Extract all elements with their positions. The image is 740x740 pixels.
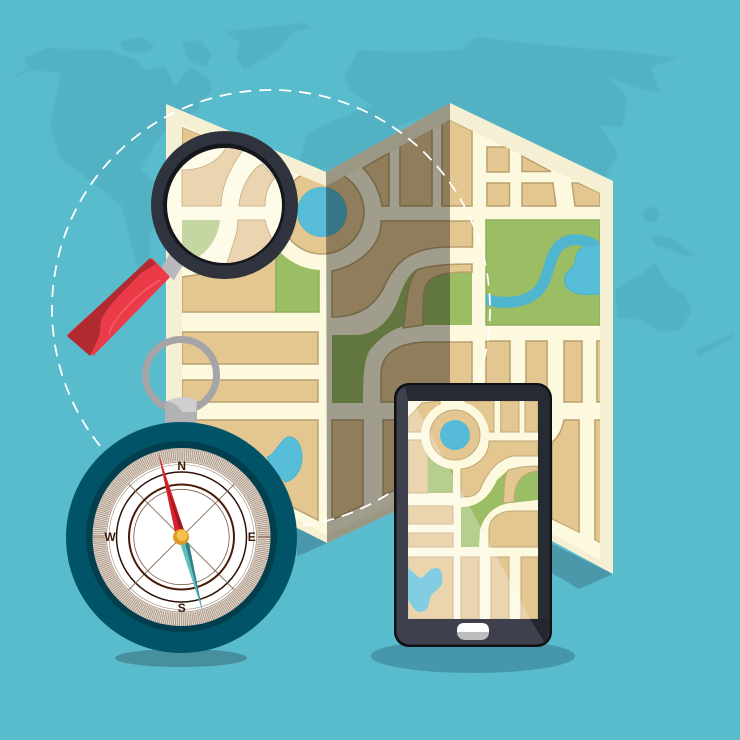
phone roundabout	[421, 401, 489, 469]
dashed route circle	[52, 90, 490, 528]
map sheet	[166, 103, 613, 574]
compass	[66, 340, 297, 667]
map blocks	[182, 120, 603, 545]
smartphone	[371, 383, 575, 673]
fold shadow on middle panel	[326, 103, 450, 543]
phone shadow	[371, 639, 575, 673]
compass letters: W	[104, 530, 116, 544]
compass body	[66, 422, 297, 653]
compass needle	[158, 453, 203, 613]
screen glare	[408, 401, 530, 619]
roundabout with lake	[280, 176, 365, 270]
small lake	[267, 437, 302, 482]
compass shadow	[115, 649, 247, 667]
map sheet group	[166, 103, 613, 589]
phone screen	[408, 401, 538, 619]
compass letters	[104, 459, 256, 615]
river and lake	[484, 240, 602, 302]
compass dial	[92, 448, 271, 626]
phone home button	[457, 623, 489, 640]
world map background	[8, 23, 735, 356]
magnifying glass	[67, 131, 298, 356]
map shadow	[297, 528, 613, 589]
lens frame	[151, 131, 298, 279]
compass letters: E	[248, 530, 256, 544]
compass letters: N	[177, 459, 186, 473]
compass crown	[165, 397, 197, 423]
phone body	[394, 383, 552, 647]
lens view	[167, 148, 282, 263]
compass ring	[146, 340, 216, 410]
phone lake	[408, 568, 442, 612]
handle	[67, 248, 186, 356]
compass letters: S	[178, 601, 186, 615]
